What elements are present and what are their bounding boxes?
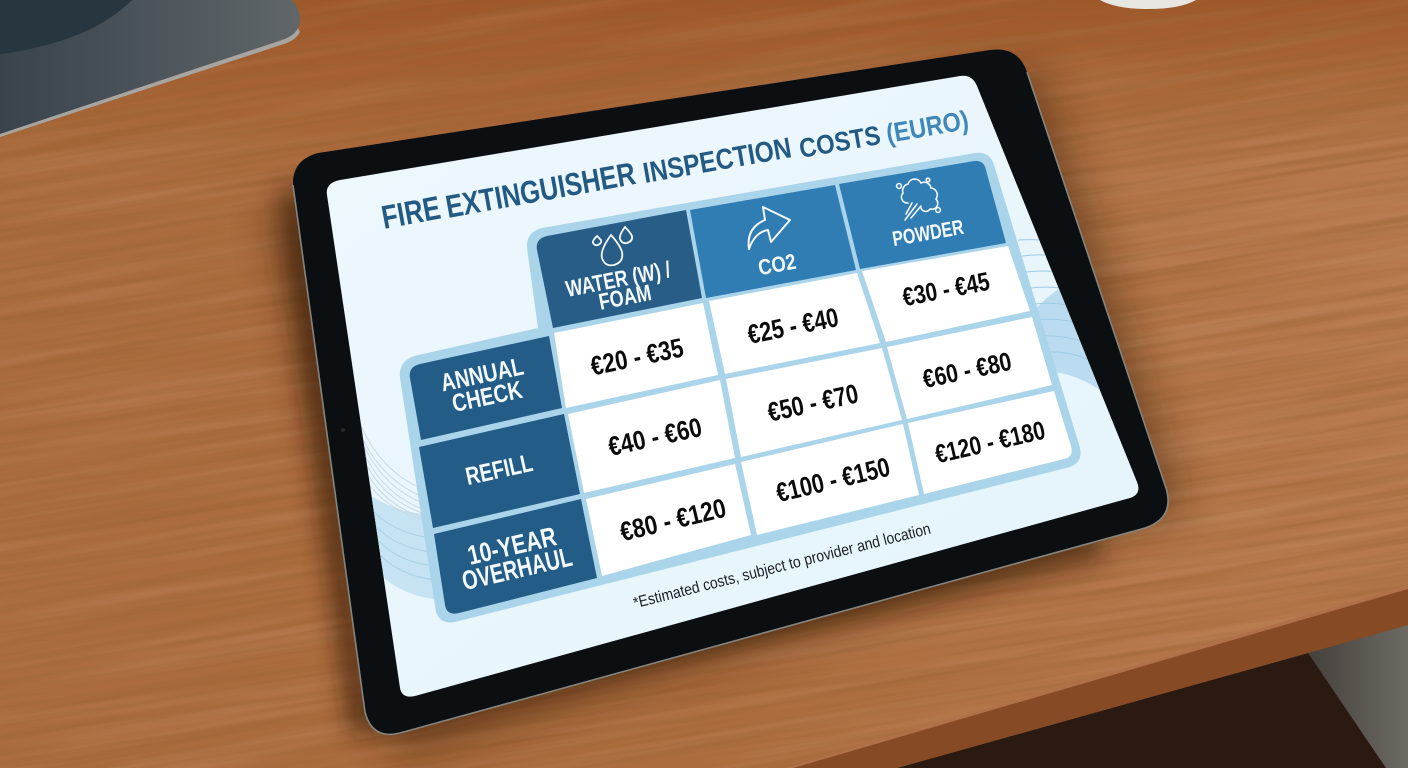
cell: annual co2 — [709, 273, 880, 374]
header: co2 — [690, 185, 856, 298]
cell: annual co2: €25 - €40 — [745, 302, 841, 350]
screen — [327, 76, 1138, 697]
cell: annual water: €20 - €35 — [588, 333, 686, 381]
header: co2: CO2 — [756, 249, 798, 280]
tablet shadow — [270, 70, 1185, 760]
row label: 10-year overhaul: 10-YEAR — [465, 521, 559, 571]
footnote: *Estimated costs, subject to provider and location — [632, 521, 933, 612]
title: INSPECTION — [641, 132, 794, 190]
cell: refill co2: €50 - €70 — [765, 378, 861, 428]
cell: overhaul powder: €120 - €180 — [932, 415, 1048, 469]
cell: annual water — [554, 303, 718, 408]
row label: annual check: ANNUAL — [438, 353, 526, 397]
cell: refill powder: €60 - €80 — [920, 346, 1014, 394]
row label: refill: REFILL — [463, 449, 535, 491]
title: EXTINGUISHER — [443, 155, 638, 225]
cell: overhaul co2 — [741, 424, 919, 535]
title: FIRE — [379, 189, 443, 236]
header: water foam: WATER (W) / — [563, 256, 673, 302]
icon: water drops — [593, 227, 632, 265]
tablet edge highlight — [293, 72, 1168, 734]
camera — [341, 428, 345, 432]
cost table — [400, 153, 1081, 623]
cell: overhaul water: €80 - €120 — [617, 493, 729, 547]
tablet — [293, 49, 1168, 734]
tablet body — [293, 49, 1168, 734]
icon: powder cloud — [897, 178, 940, 220]
cell: overhaul co2: €100 - €150 — [773, 452, 893, 508]
cell: refill co2 — [726, 348, 902, 457]
title — [379, 105, 971, 236]
cell: annual powder — [862, 246, 1030, 342]
row label: 10-year overhaul — [434, 499, 597, 614]
mug base — [1100, 0, 1196, 9]
background waves — [355, 240, 1110, 600]
cell: refill water: €40 - €60 — [605, 412, 705, 462]
cell: refill powder — [887, 317, 1052, 419]
icon: arrow — [749, 207, 790, 249]
cell: refill water — [568, 380, 735, 493]
header: powder: POWDER — [891, 216, 966, 251]
header: water foam: FOAM — [597, 279, 653, 315]
row label: refill — [419, 414, 580, 528]
header: water foam — [537, 210, 702, 328]
title: (EURO) — [884, 105, 971, 149]
row label: annual check: CHECK — [450, 376, 525, 418]
cell: overhaul powder — [908, 391, 1072, 494]
header: powder — [839, 161, 1006, 269]
title: COSTS — [797, 120, 883, 164]
table frame — [400, 153, 1081, 623]
row label: annual check — [410, 336, 562, 440]
monitor stand — [0, 0, 300, 137]
floor below desk edge — [786, 585, 1408, 768]
cell: annual powder: €30 - €45 — [900, 266, 992, 312]
cell: overhaul water — [586, 464, 751, 576]
row label: 10-year overhaul: OVERHAUL — [459, 542, 575, 596]
